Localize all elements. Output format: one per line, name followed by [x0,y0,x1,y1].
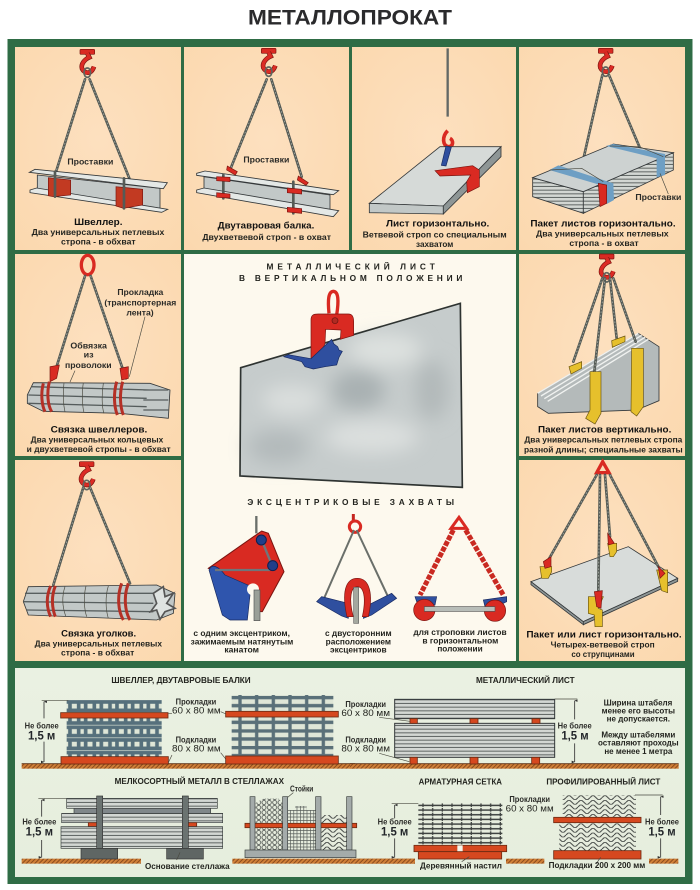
note: не допускается. [607,714,670,724]
caption: Швеллер. [74,217,122,227]
label: spacer [104,288,177,377]
dimension: Не более [558,721,592,730]
dimension: 1,5 м [28,728,55,742]
caption [32,217,165,246]
I-beam stack [226,695,338,764]
caption: Связка швеллеров. [51,424,147,434]
captions: эксцентриков [330,645,387,655]
caption [202,221,331,242]
label [506,795,554,813]
panel: channel bundle background [15,254,181,456]
special grab [435,146,479,193]
icon: hook [79,462,94,490]
icon: hook [261,48,276,76]
caption: Пакет листов вертикально. [538,425,671,435]
label [168,698,226,763]
note: менее его высоты [602,706,675,716]
caption: Два универсальных петлевых [35,638,162,648]
note [598,697,679,756]
caption: захватом [416,239,453,249]
caption: Четырех-ветвевой строп [551,640,655,650]
caption [35,628,162,657]
heading: АРМАТУРНАЯ СЕТКА [419,777,502,787]
panel: sheet pack [530,48,681,248]
caption: и двухветвевой стропы - в обхват [27,444,171,454]
label: Прокладки [176,698,216,707]
label: 60 х 80 мм [341,708,390,718]
dimension [555,699,592,762]
captions: для строповки листов [413,627,507,637]
caption [524,425,683,455]
dimension: Не более [645,818,680,827]
dimension: Не более [22,817,57,826]
slings [573,278,636,372]
label: 60 х 80 мм [506,803,554,813]
label: 80 х 80 мм [341,744,390,754]
captions: зажимаемым натянутым [191,636,293,646]
heading: В ВЕРТИКАЛЬНОМ ПОЛОЖЕНИИ [239,273,462,283]
label: Подкладки [176,736,216,745]
mesh stack [414,803,507,862]
panel: horizontal pack background [519,460,685,661]
caption: стропа - в охват [569,238,639,248]
note: Между штабелями [601,730,675,740]
ground row one [22,764,355,769]
ground row two [350,859,678,864]
ground row two [22,859,415,864]
caption: стропа - в обхват [61,236,136,246]
label: wire tie: из [84,351,94,360]
label: wire tie [65,341,112,382]
panel: channel background [15,47,181,250]
label: wire tie: Обвязка [70,341,108,350]
captions: канатом [224,645,259,655]
slings [50,276,128,382]
panel: storage left half [22,675,415,871]
label: Прокладки [345,700,386,709]
panel: storage background [15,668,685,877]
dimension [22,798,67,857]
plate [531,547,678,625]
panel: sheet background [352,47,516,250]
captions: положении [437,644,483,654]
label: spacer: (транспортерная [104,299,177,308]
grab one [208,516,284,621]
slings [582,75,639,167]
dimension [635,795,680,857]
icon: hook [598,48,613,76]
icon: link [597,462,609,473]
slings [548,475,658,590]
rack front view [245,785,357,858]
caption: Два универсальных петлевых [32,227,165,237]
caption [530,218,676,248]
dimension [25,701,68,762]
label: wire tie: проволоки [65,361,112,370]
note: не менее 1 метра [604,746,673,756]
panel: centre top [239,260,462,487]
caption: Ветвевой строп со специальным [363,229,507,239]
panel: channel bundle [27,255,177,454]
sheet stacks [395,699,555,764]
panel: sheet pack background [519,47,685,250]
heading [239,260,462,283]
label: Основание стеллажа [145,861,230,871]
caption: разной длины; специальные захваты [524,445,683,455]
label: Деревянный настил [420,860,502,870]
caption: Лист горизонтально. [386,219,489,229]
channel beam [29,169,168,212]
captions: в горизонтальном [422,635,498,645]
panel: channel [29,49,168,246]
label: Подкладки [345,736,386,745]
captions: с одним эксцентриком, [193,628,290,638]
panel: horizontal pack [526,462,682,659]
bundle [27,382,170,418]
rope [444,48,451,117]
dimension: 1,5 м [381,825,408,839]
heading: ШВЕЛЛЕР, ДВУТАВРОВЫЕ БАЛКИ [111,675,251,685]
heading: ЭКСЦЕНТРИКОВЫЕ ЗАХВАТЫ [247,497,454,507]
plate pack [538,333,659,413]
clamp [284,291,354,369]
captions [191,627,507,655]
caption [526,630,682,659]
panel: sheet horizontally [363,48,507,249]
note: оставляют проходы [598,738,679,748]
captions: расположением [326,636,391,646]
heading: ПРОФИЛИРОВАННЫЙ ЛИСТ [546,776,660,787]
label: 60 х 80 мм [172,706,221,716]
label [635,173,681,202]
panel: vertical pack background [519,254,685,456]
label: Прокладки [509,795,550,804]
caption: Двутавровая балка. [218,221,314,231]
plate [369,147,501,214]
label [341,700,410,762]
panel: I-beam background [184,47,349,250]
rack side view [61,796,223,859]
dimension [378,803,418,857]
caption: Связка уголков. [61,628,136,638]
icon: hook [599,254,614,282]
caption: Пакет или лист горизонтально. [526,630,682,640]
slings [53,487,130,585]
metal sheet [240,303,462,487]
label: Проставки [635,193,681,202]
I-beam [197,166,339,217]
grab three [414,517,507,621]
label: spacer: Прокладка [117,288,164,297]
sheet stack [533,144,673,213]
caption: Двухветвевой строп - в охват [202,232,331,242]
slings [55,79,129,178]
label: 80 х 80 мм [172,744,221,754]
grab two [317,514,397,623]
heading: МЕТАЛЛИЧЕСКИЙ ЛИСТ [476,674,575,685]
label: Проставки [243,156,289,165]
profiled sheet stack [554,795,641,864]
screw clamps [540,533,668,627]
dimension: 1,5 м [26,825,53,839]
panel: I-beam [197,48,339,242]
dimension: Не более [25,721,59,730]
slings [230,79,302,177]
icon: ring [81,255,94,275]
panel: angle bundle [23,462,175,657]
captions: с двусторонним [325,628,392,638]
caption: Два универсальных петлевых [536,228,669,238]
ground row one [350,764,679,769]
label [145,852,230,871]
label: Подкладки 200 х 200 мм [549,860,645,870]
note: Ширина штабеля [604,697,672,707]
panel: centre background [184,254,516,661]
caption: Пакет листов горизонтально. [530,218,676,228]
panel: vertical pack [524,254,683,455]
panel: angle bundle background [15,460,181,661]
panel: storage right half [341,674,680,870]
channel stack [61,700,168,764]
caption: стропа - в обхват [61,647,134,657]
clamps [569,336,643,424]
caption: Два универсальных петлевых стропа [524,435,683,445]
dimension: 1,5 м [648,825,676,839]
label: spacer: лента) [126,309,154,318]
heading: МЕЛКОСОРТНЫЙ МЕТАЛЛ В СТЕЛЛАЖАХ [115,775,284,786]
rack front view: Стойки [290,785,313,794]
dimension: Не более [378,818,412,827]
panel: eccentric grabs [191,497,507,655]
caption: Два универсальных кольцевых [31,434,164,444]
label: Проставки [67,157,113,166]
bundle [23,583,175,620]
caption [27,424,171,454]
caption: со струпцинами [571,649,635,659]
caption [363,219,507,249]
heading: МЕТАЛЛИЧЕСКИЙ ЛИСТ [266,260,435,271]
icon: hook [80,49,95,77]
title: МЕТАЛЛОПРОКАТ [248,6,452,30]
icon: small hook [444,131,453,147]
dimension: 1,5 м [561,728,589,742]
